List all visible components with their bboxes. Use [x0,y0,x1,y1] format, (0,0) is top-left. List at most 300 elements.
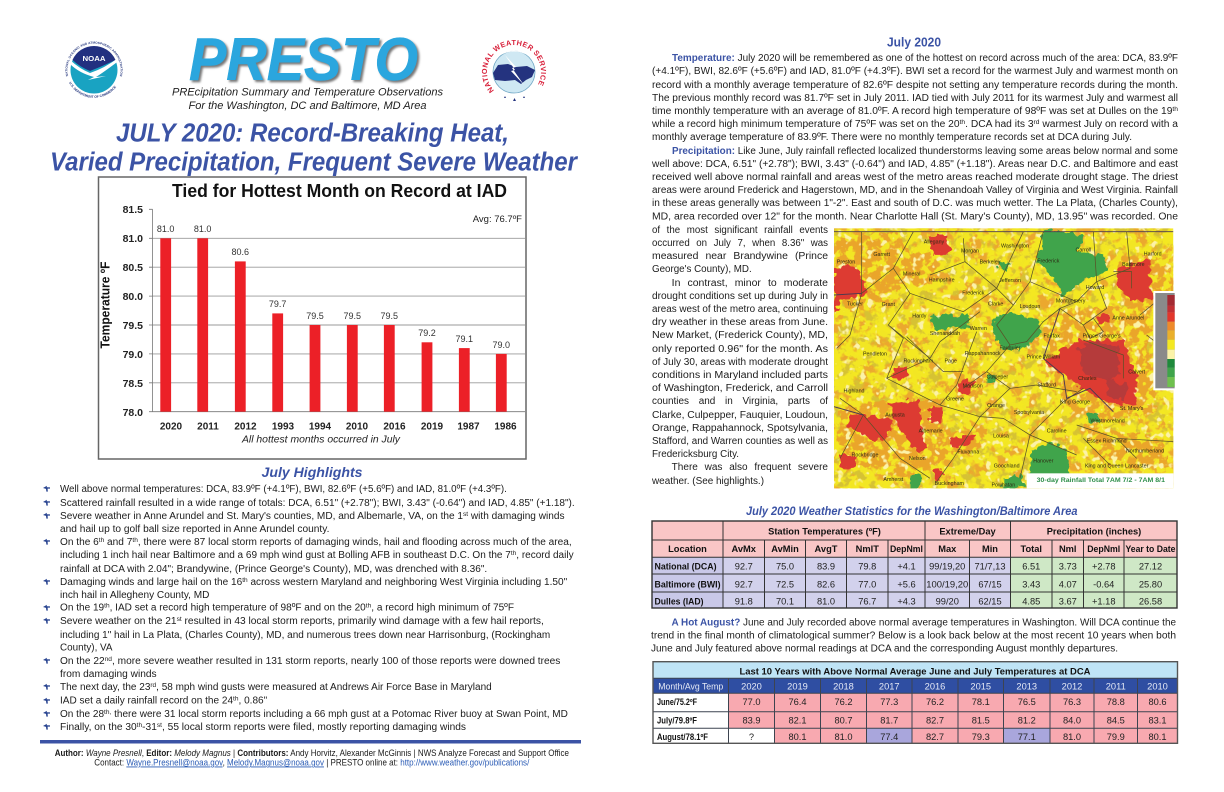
county labels: Rockbridge [852,453,879,459]
bar value labels: 79.7 [269,299,286,309]
text block: temperature: th [1172,106,1178,113]
text block: drought conditions [652,278,828,460]
county labels: Prince George's [1083,334,1121,340]
row: Baltimore (BWI): 3.43 [1022,580,1040,590]
highlight: 6th and 7th: , record daily [516,550,574,561]
county labels: Preston [837,259,855,265]
icon: PRESTO wordmark: PRESTO [189,26,418,93]
table year header row: Month/Avg Temp [658,682,723,692]
text block: severe weather note: There was also frequent severe [672,462,828,473]
text block: temperature: The previous monthly record was 81.7ºF set in July 2011. IAD tied with July 2011 for its warmest July and warmest all [652,93,1178,104]
y axis labels: 81.5 [123,204,143,216]
x axis labels: 1994 [309,422,332,432]
table column headers [668,544,1176,554]
text block: precipitation: MD, area recorded over 12" for the month. Near Charlotte Hall (St. Mary's County), MD, 13.95" was recorded. One [652,212,1178,222]
highlight: 6th and 7th: including 1 inch hail near Baltimore and a 69 mph wind gust at Bolling AFB in southeast D.C. On the 7 [60,550,510,561]
highlight: 21st [43,616,550,654]
highlight: 30th-31st: Finally, on the 30 [60,722,135,733]
row: June: June/75.2ºF [657,697,697,707]
county labels: Howard [1086,285,1104,291]
title: JULY 2020: Record-Breaking Heat, [116,120,509,148]
row: Dulles (IAD): +4.3 [897,596,916,606]
text block: drought conditions: dry weather in these areas from June. [652,317,828,328]
highlight: 28th: th, [104,709,111,716]
highlight: 28th: there were 31 local storm reports including a 66 mph gust at a Potomac River buoy at Swan Point, MD [111,709,568,720]
highlight: 19th and 20th: , IAD set a record high temperature of 98ºF and on the 20 [110,602,366,614]
highlight: 30th-31st: th [137,722,143,729]
y axis labels: 79.0 [123,349,143,361]
highlight: 16th [43,577,568,601]
map legend [1153,291,1175,390]
icon: NOAA logo: U.S. DEPARTMENT OF COMMERCE [69,82,116,98]
county labels: Nelson [909,456,926,462]
table year header row: 2012 [1062,682,1082,692]
county labels: Garrett [873,252,890,258]
county labels: Page [944,359,957,365]
row: National (DCA): 71/7,13 [974,562,1006,572]
row: July: 81.2 [1018,716,1036,726]
county labels: Buckingham [935,481,965,487]
highlight: 19th and 20th: th [104,602,110,610]
table group headers: Station Temperatures (ºF) [768,526,881,536]
highlight: severe weather on the 1st: st [463,511,468,518]
table year header row: 2019 [787,682,808,692]
text block: precipitation: measured near Brandywine (Prince [652,251,828,262]
highlight: 30th-31st: -31 [142,722,157,733]
county labels: Anne Arundel [1112,315,1144,321]
row: National (DCA): National (DCA) [654,562,716,572]
row: June: 80.6 [1148,697,1167,707]
text block: precipitation: Precipitation: Like June, July rainfall reflected localized thunderstorms leaving some areas below normal and some [672,146,1178,157]
y axis labels: 81.0 [123,233,143,245]
title [50,120,579,176]
highlight: 23rd: rd [150,682,157,689]
x axis labels: 2020 [160,422,183,432]
table column headers: NmlT [856,544,879,554]
red and green rainfall blobs [834,230,1152,488]
row: June: 78.1 [972,697,990,707]
county labels: Calvert [1128,369,1146,375]
row: August: 81.0 [1063,732,1081,742]
highlight: 16th: inch hail in Allegheny County, MD [60,590,209,601]
subtitle: For the Washington, DC and Baltimore, MD Area [188,100,426,112]
row: July: 82.1 [788,716,807,726]
row: July [657,716,1167,726]
bar value labels: 79.2 [418,328,436,338]
text block: temperature: rd [1034,119,1040,126]
table group headers: Precipitation (inches) [1047,526,1141,536]
county labels: Rockingham [904,359,934,365]
text block: temperature [651,53,1178,143]
row: Dulles (IAD) [654,596,1162,606]
row: July: 83.9 [742,716,761,726]
text block: drought conditions: drought conditions set up during July in [652,291,828,302]
row: Baltimore (BWI): 72.5 [776,580,794,590]
highlight: 6th and 7th: On the 6 [60,537,98,548]
highlight: 19th and 20th: th [366,602,372,610]
county labels: Highland [843,389,865,395]
county labels: Powhatan [991,483,1015,489]
table year header row: 2018 [833,682,854,692]
text block: drought conditions: In contrast, minor to moderate [672,278,828,289]
county labels: Frederick [962,290,985,296]
row: Dulles (IAD): 26.58 [1139,596,1162,606]
text block: precipitation: occurred on July 7, when 8.36" was [652,238,828,249]
county labels: King George [1060,399,1090,405]
y axis labels: 80.0 [123,291,143,303]
row: Baltimore (BWI): 77.0 [858,580,876,590]
highlight: 22nd [43,656,560,680]
row: National (DCA): 92.7 [735,562,753,572]
x axis labels: 1993 [272,422,295,432]
x axis labels: 2012 [234,422,257,432]
text block: drought conditions: New Market, (Frederick County), MD, [652,330,828,341]
county labels: Hanover [1033,459,1054,465]
row: Dulles (IAD): 62/15 [978,596,1002,606]
row: Dulles (IAD): 70.1 [776,596,794,606]
icon: NOAA logo: NATIONAL OCEANIC AND ATMOSPHERIC ADMINISTRATION [65,42,123,76]
table year header row: 2015 [970,682,991,692]
table column headers: Nml [1059,544,1077,554]
row: Baltimore (BWI): +5.6 [897,580,916,590]
row: Baltimore (BWI): 100/19,20 [926,580,968,590]
row: Baltimore (BWI): -0.64 [1093,580,1114,590]
table: July 2020 weather statistics [652,521,1177,608]
highlight: 30th-31st: , 55 local storm reports were filed, mostly reporting damaging winds [162,722,466,733]
table column headers: Year to Date [1126,544,1176,554]
row: National (DCA): +2.78 [1092,562,1116,572]
row: Baltimore (BWI): 82.6 [817,580,835,590]
table year header row: 2010 [1147,682,1168,692]
row: Dulles (IAD): 3.67 [1059,596,1077,606]
county labels: Pendleton [863,352,887,358]
text block: precipitation: areas were around Frederick and Hagerstown, MD, and in the Shenandoah Valley of Virginia and West Virginia. Rainfall [652,185,1178,196]
row: Baltimore (BWI): 92.7 [735,580,753,590]
county labels: King and Queen Lancaster [1085,463,1149,469]
table title row: Last 10 Years with Above Normal Average June and July Temperatures at DCA [740,666,1091,676]
highlight: 28th: On the 28 [60,709,104,720]
row: Dulles (IAD): 91.8 [735,596,753,606]
table year header row: 2020 [741,682,762,692]
map caption [1027,473,1173,488]
highlight: 16th: Damaging winds and large hail on the 16 [60,577,241,588]
county labels: Jefferson [999,278,1021,284]
table column headers: Max [938,544,957,554]
county labels: Shenandoah [930,331,960,337]
county labels: Northumberland [1126,448,1164,454]
text block: a hot August: trend in the final month of climatological summer? Below is a look back below at the most recent 10 years when both [651,630,1176,642]
county labels: Morgan [961,249,979,255]
row: Baltimore (BWI): 4.07 [1059,580,1077,590]
county labels: Harford [1144,252,1162,258]
text block: drought conditions: Stafford, and Warren counties as well as [652,436,828,447]
highlight: 21st: County), VA [60,642,113,654]
y axis labels: 78.5 [123,378,143,390]
text block: temperature: (+4.1ºF), BWI, 82.6ºF (+5.6ºF) and IAD, 81.0ºF (+4.3ºF). BWI set a record for the warmest July and warmest month on [652,66,1178,77]
highlight: 19th and 20th [43,602,514,614]
table group headers [768,526,1141,536]
row: Baltimore (BWI): 25.80 [1139,580,1162,590]
bar value labels: 79.5 [344,311,361,321]
row: June: 76.2 [834,697,853,707]
row: August: 77.1 [1018,732,1036,742]
highlight: 6th and 7th: th [99,537,105,544]
icon: NOAA logo: NOAA [82,54,106,63]
highlight: 24th: , 0.86" [239,696,268,706]
text block: a hot August [651,618,1176,654]
row: Dulles (IAD): +1.18 [1092,596,1116,606]
row: June [657,697,1167,707]
row: Baltimore (BWI): 67/15 [978,580,1002,590]
row: June: 78.8 [1107,697,1125,707]
text block: drought conditions: Orange, Rappahannock, Spotsylvania, [652,423,828,434]
county labels: Augusta [885,413,905,419]
footer credits [55,748,569,768]
x axis labels: 2016 [383,422,406,432]
row: July: 82.7 [926,716,944,726]
county labels: Orange [987,403,1005,409]
icon: National Weather Service logo: NATIONAL WEATHER SERVICE [482,40,546,94]
text block: precipitation: of the most significant rainfall events [652,225,828,236]
county labels: Albemarle [919,429,943,435]
text block: precipitation: received well above normal rainfall and areas west of the metro areas reached moderate drought stage. The driest [652,172,1178,183]
heading: July 2020: July 2020 [887,36,941,50]
county labels: Hampshire [929,277,955,283]
text block: precipitation: George's County), MD. [652,264,752,275]
county labels: Clarke [988,301,1003,307]
highlight: 23rd: , 58 mph wind gusts were measured at Andrews Air Force Base in Maryland [156,682,492,693]
text block: temperature: . DCA had its 3 [965,119,1034,130]
row: Dulles (IAD): 4.85 [1022,596,1040,606]
text block: drought conditions: areas west of the metro area, continuing [652,304,828,315]
text block: a hot August: June and July featured above normal readings at DCA and the corresponding August monthly departures. [651,644,1118,654]
text block: precipitation: in these areas generally was between 1"-2". East and south of D.C. was much wetter. The La Plata, (Charles County), [652,198,1178,209]
bar value labels: 80.6 [232,247,249,257]
row: August: 77.4 [880,732,898,742]
county labels: Loudoun [1020,304,1040,310]
text block: drought conditions: of Washington, Frederick, and Carroll [652,383,828,394]
row: National (DCA): 3.73 [1059,562,1077,572]
county labels: Washington [1001,243,1029,249]
county labels: Montgomery [1056,298,1086,304]
highlight: 21st: st [177,616,182,623]
table group headers: Extreme/Day [939,526,996,536]
x axis labels: 1987 [457,422,480,432]
table year header row: 2011 [1106,682,1126,692]
county labels: Fauquier [999,345,1021,351]
bar value labels: 81.0 [157,224,174,234]
footer credits: Author: Wayne Presnell, Editor: Melody Magnus | Contributors: Andy Horvitz, Alexander McGinnis | NWS Analyze Forecast and Support Office [55,748,569,758]
county labels: Prince William [1026,355,1061,361]
county labels: Westmoreland [1091,419,1125,425]
row: Dulles (IAD): 99/20 [936,596,959,606]
row: July: 84.0 [1063,716,1081,726]
heading: July Highlights: July Highlights [262,465,363,480]
highlight: 6th and 7th [43,537,574,575]
county labels: Stafford [1037,383,1056,389]
row: National (DCA) [654,562,1162,572]
text block: drought conditions: conditions in Maryland included parts [652,370,828,381]
row: June: 76.5 [1018,697,1036,707]
county labels: Rappahannock [965,351,1001,357]
row: August: 80.1 [788,732,807,742]
row: August: 79.3 [972,732,990,742]
text block: temperature: time monthly temperature with an average of 81.0ºF. A record high temperature of 98ºF was set at Dulles on the 19 [652,106,1159,117]
county labels: Amherst [883,477,904,483]
highlight: 24th: IAD set a daily rainfall record on the 24 [60,696,232,706]
footer credits: Contact: Wayne.Presnell@noaa.gov, Melody.Magnus@noaa.gov | PRESTO online at: http://www.weather.gov/publications/ [94,758,530,768]
x axis labels: 1986 [494,422,517,432]
table: last 10 years above normal at DCA [653,662,1178,743]
text block: temperature: record with a monthly average temperature of 82.6ºF despite not setting any temperature records during the month. [652,80,1178,91]
row: National (DCA): +4.1 [897,562,916,572]
highlight: 19th and 20th: On the 19 [60,602,104,614]
highlight: rainfall: Scattered rainfall resulted in a wide range of totals: DCA, 6.51" (+2.78"); BWI, 3.43" (-0.64") and IAD, 4.85" (+1.18"). [60,498,575,509]
row: June: 77.0 [742,697,761,707]
highlight: 21st: Severe weather on the 21 [60,616,175,627]
highlight: severe weather on the 1st: and hail up to golf ball size reported in Anne Arundel county. [60,524,329,535]
text block: precipitation: well above: DCA, 6.51" (+2.78"); BWI, 3.43" (-0.64") and IAD, 4.85" (+1.18"). Areas near D.C. and Baltimore and east [651,159,1178,170]
text block: temperature: warmest July on record with a [1039,119,1178,130]
row: June: 77.3 [880,697,898,707]
county labels [837,239,1164,489]
table year header row: 2013 [1016,682,1037,692]
table column headers: DepNml [1087,544,1120,554]
row: August: 80.1 [1148,732,1167,742]
row: July: July/79.8ºF [657,716,697,726]
highlight: 16th: across western Maryland and neighboring West Virginia including 1.50" [248,577,568,588]
county labels: Caroline [1047,428,1067,434]
highlight: 24th: th [233,696,239,702]
text block: temperature: while a record high minimum temperature of 75ºF was set on the 20 [652,119,952,130]
bar value labels: 81.0 [194,224,211,234]
subtitle [172,86,443,112]
county labels: Carroll [1075,248,1091,254]
bars [160,238,507,412]
county labels: Charles [1078,376,1097,382]
bar value labels: 79.5 [306,311,324,321]
table year header row [658,682,1168,692]
highlight: 22nd: nd [105,656,112,663]
y axis labels [123,204,143,419]
row: Dulles (IAD): 81.0 [817,596,835,606]
highlight: severe weather on the 1st [43,511,564,535]
table column headers: DepNml [890,544,923,554]
orange rainfall blobs [833,232,1173,478]
text block: precipitation [651,146,1178,275]
text block: drought conditions: Fredericksburg City. [652,449,739,460]
row: Dulles (IAD): Dulles (IAD) [654,596,704,606]
subtitle: PREcipitation Summary and Temperature Observations [172,86,443,98]
county labels: Louisa [993,434,1009,440]
row: August [657,732,1167,742]
highlight: 22nd: , more severe weather resulted in 131 storm reports, nearly 100 of those reports were downed trees [112,656,560,667]
highlight: temperatures: Well above normal temperatures: DCA, 83.9ºF (+4.1ºF), BWI, 82.6ºF (+5.6ºF) and IAD, 81.0ºF (+4.3ºF). [60,484,507,495]
map caption: 30-day Rainfall Total 7AM 7/2 - 7AM 8/1 [1037,478,1166,484]
county labels: Essex Richmond [1087,439,1127,445]
text block: severe weather note: weather. (See highlights.) [651,476,764,487]
highlight: 21st: including 1" hail in La Plata, (Charles County), MD, and numerous trees down near Harrisonburg, (Rockingham [60,630,550,641]
x axis labels: 2011 [197,422,219,432]
county labels: Baltimore [1122,262,1145,268]
county labels: Tucker [847,301,863,307]
y axis labels: 80.5 [123,262,143,274]
county labels: Fluvanna [957,450,979,456]
row: National (DCA): 79.8 [858,562,876,572]
text block: drought conditions: only reported 0.96" for the month. As [652,344,828,355]
panel: bar chart of hottest months at IAD [98,177,526,459]
text block: severe weather note [651,462,828,487]
highlight: 22nd: from damaging winds [60,669,157,680]
highlight: 6th and 7th: rainfall at DCA with 2.04"; Brandywine, (Prince George's County), MD, was drenched with 8.36". [60,564,487,575]
row: August: 82.7 [926,732,944,742]
row: National (DCA): 6.51 [1022,562,1040,572]
county labels: Goochland [994,463,1020,469]
row: July: 84.5 [1107,716,1125,726]
row: August: ? [749,732,754,742]
county labels: Warren [970,326,987,332]
annotation: average: Avg: 76.7ºF [473,214,522,225]
county labels: Berkeley [980,259,1001,265]
row: National (DCA): 83.9 [817,562,835,572]
x axis labels [160,422,517,432]
heading: statistics table: July 2020 Weather Statistics for the Washington/Baltimore Area [746,506,1078,518]
chart heading: Tied for Hottest Month on Record at IAD [172,180,507,201]
x axis labels: 2019 [421,422,444,432]
chart note: All hottest months occurred in July [241,434,401,446]
y axis labels: 79.5 [123,320,143,332]
bar value labels: 79.1 [456,334,473,344]
table column headers: AvMx [732,544,757,554]
highlight: 6th and 7th: th [511,550,517,557]
row: June: 76.3 [1063,697,1081,707]
panel: highlights list [43,484,575,733]
bar value labels [157,224,510,350]
highlight: 6th and 7th: th [132,537,138,544]
county and state boundary lines [834,232,1173,482]
title: Varied Precipitation, Frequent Severe Weather [50,148,579,176]
row: July: 81.7 [880,716,898,726]
row: Baltimore (BWI) [654,580,1162,590]
y axis labels: 78.0 [123,407,143,419]
y axis title: Temperature ºF [98,261,112,348]
highlight: severe weather on the 1st: with damaging winds [468,511,564,522]
row: National (DCA): 27.12 [1139,562,1162,572]
highlight: severe weather on the 1st: Severe weather in Anne Arundel and St. Mary's counties, MD, and Albemarle, VA, on the 1 [60,511,460,522]
x axis labels: 2010 [346,422,369,432]
bar value labels: 79.5 [381,311,398,321]
row: National (DCA): 99/19,20 [929,562,965,572]
map: 30-day rainfall total [830,225,1180,492]
county labels: Allegany [924,239,945,245]
county labels: Fairfax [1044,334,1060,340]
table column headers: AvMin [771,544,799,554]
row: August: 81.0 [834,732,853,742]
county labels: Greene [946,397,964,403]
text block: temperature: th [960,119,966,126]
highlight: 23rd: The next day, the 23 [60,682,150,693]
row: August: 79.9 [1107,732,1125,742]
highlight: 30th-31st: st [157,722,162,729]
table column headers: AvgT [815,544,838,554]
highlight: 22nd: On the 22 [60,656,104,667]
county labels: Mineral [903,271,920,277]
highlight: 21st: resulted in 43 local storm reports, primarily wind damage with a few hail reports, [182,616,544,627]
highlight: 6th and 7th: and 7 [104,537,133,548]
county labels: Culpeper [987,375,1008,381]
row: August: August/78.1ºF [657,732,708,742]
county labels: Frederick [1037,258,1060,264]
